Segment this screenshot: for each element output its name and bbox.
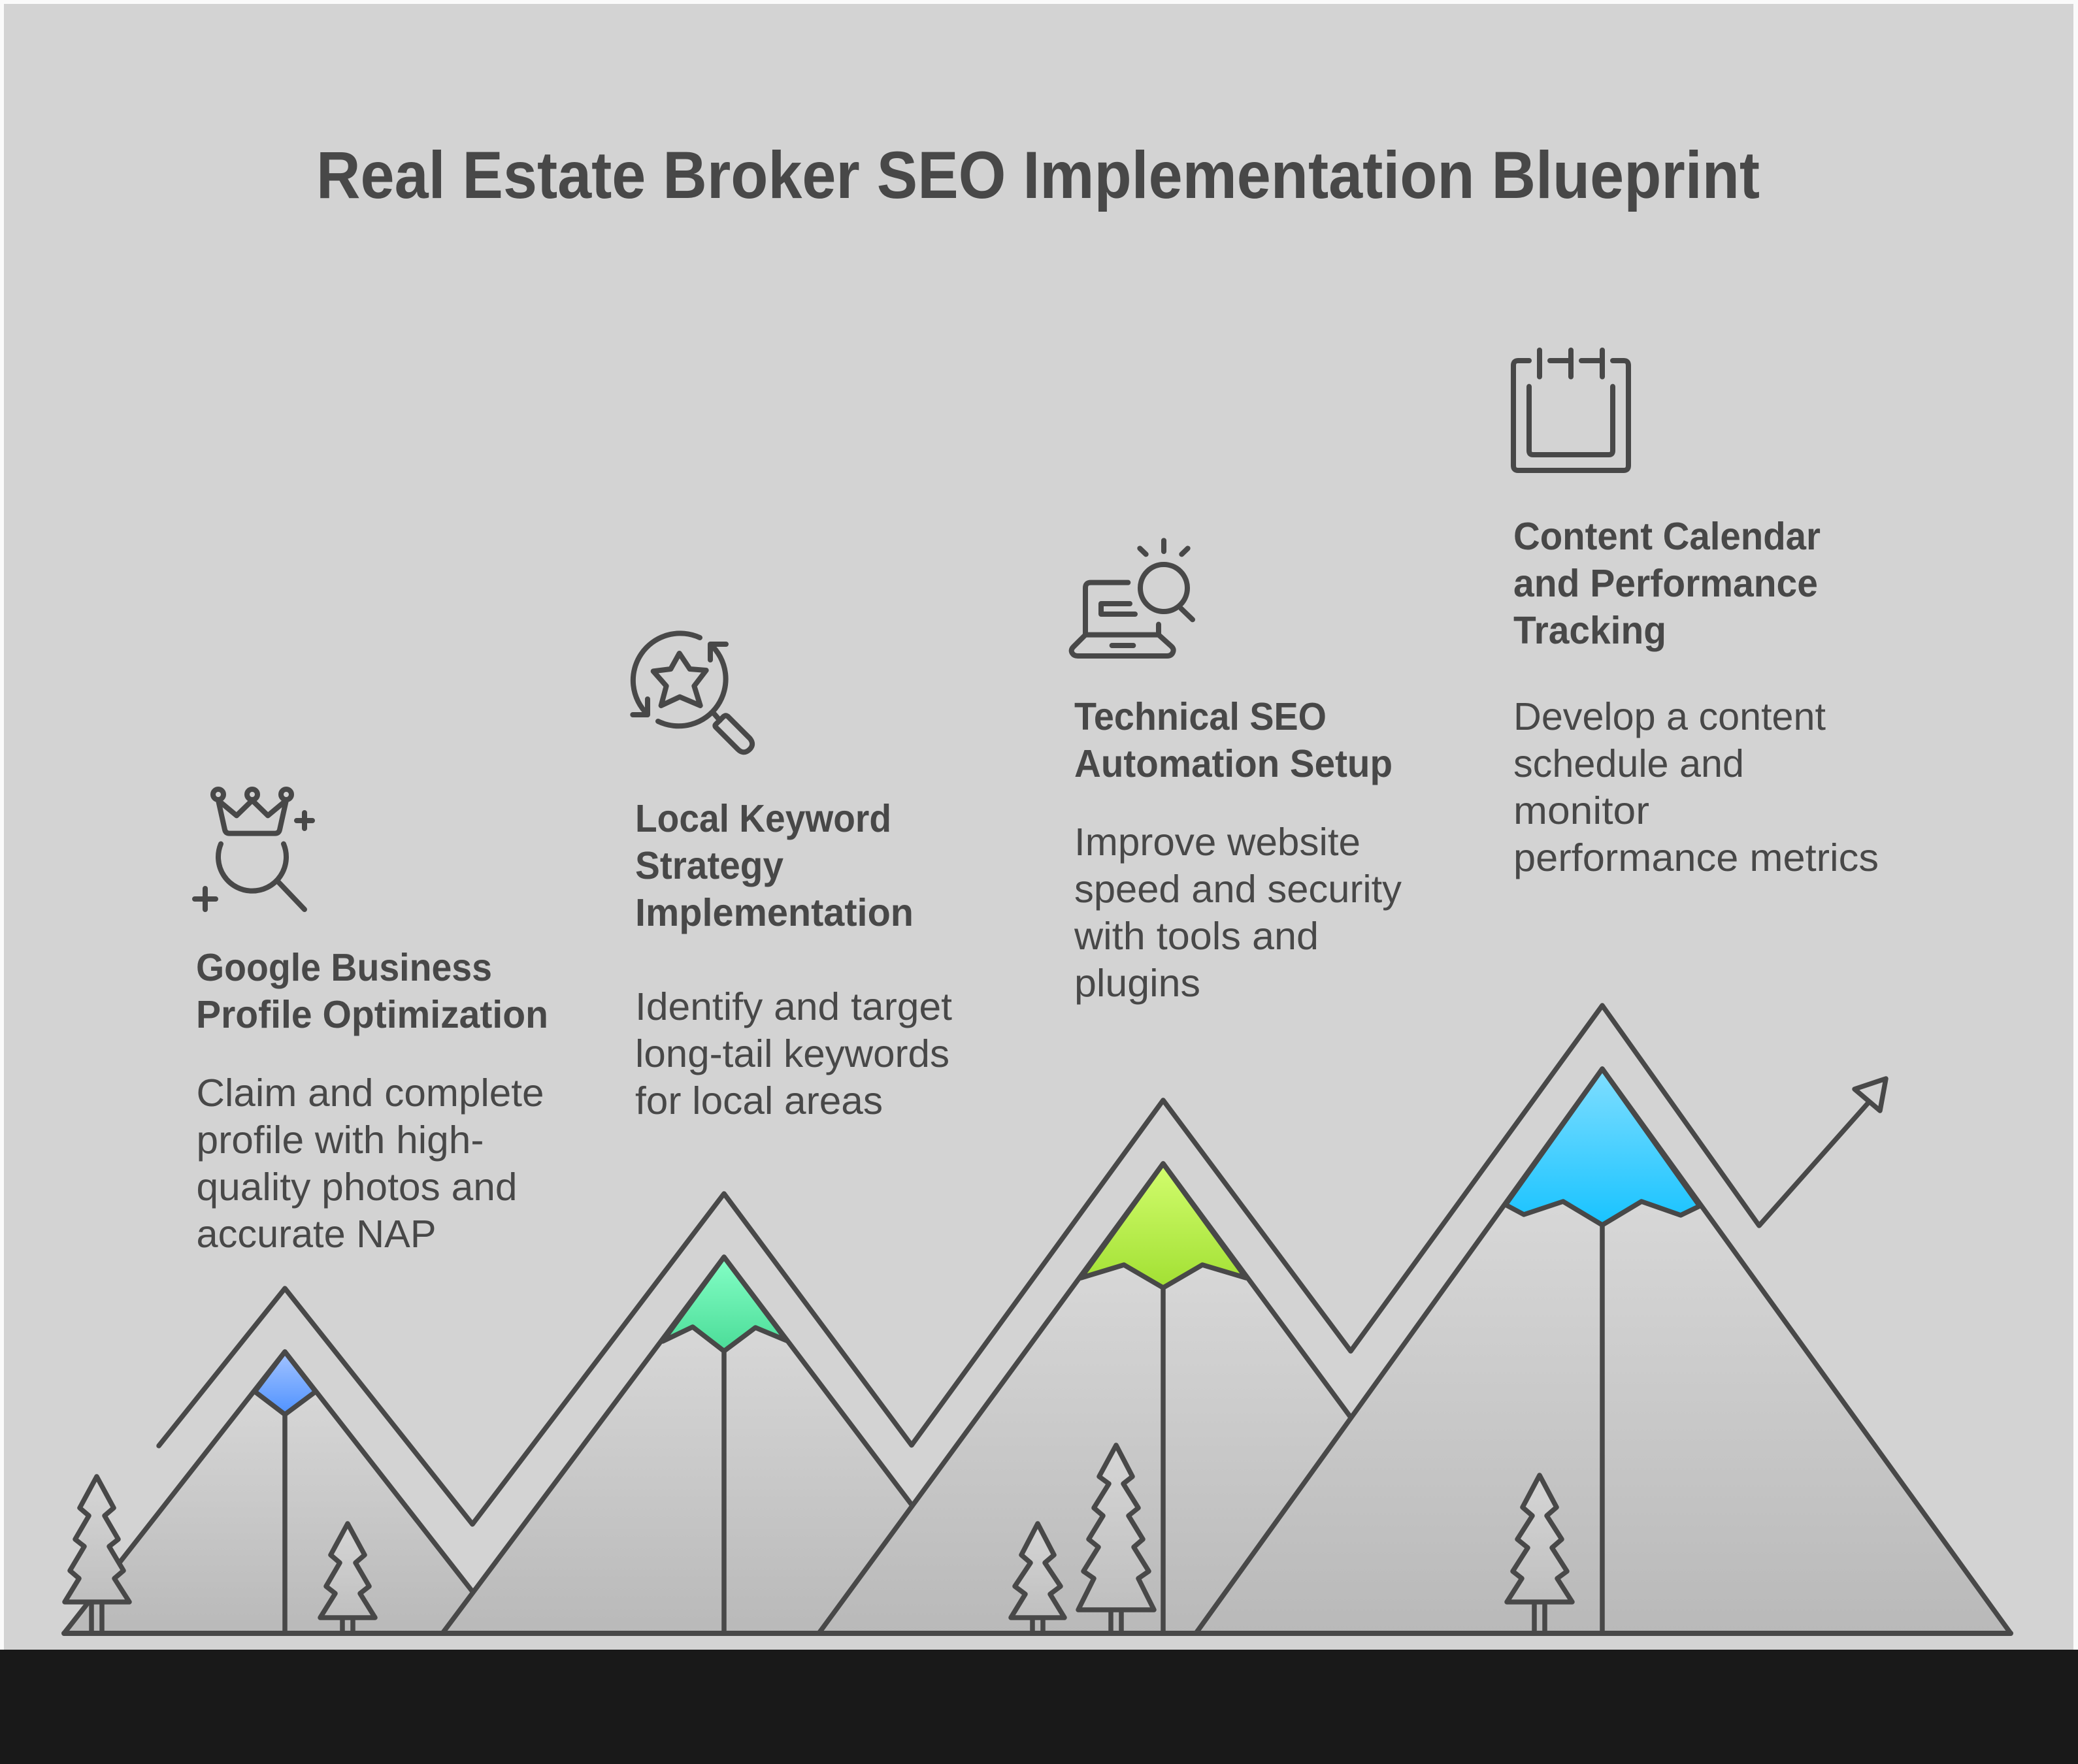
heading: Tracking (1513, 609, 1666, 652)
description: with tools and (1074, 915, 1319, 958)
description: Identify and target (635, 985, 952, 1028)
icon: laptop with magnifier (1072, 540, 1193, 656)
description (1074, 821, 1402, 1005)
description: quality photos and (196, 1166, 518, 1209)
heading (1074, 695, 1393, 785)
icon: calendar (1513, 350, 1628, 470)
tree 3 (1011, 1524, 1064, 1633)
description: schedule and (1513, 742, 1744, 785)
description (196, 1071, 544, 1256)
heading (196, 946, 548, 1036)
heading: Profile Optimization (196, 993, 548, 1036)
description: Develop a content (1513, 695, 1826, 738)
tree 1 (65, 1477, 129, 1633)
heading (635, 797, 914, 934)
heading: Implementation (635, 891, 914, 934)
mountain 4 with cyan peak (1196, 1069, 2011, 1633)
step 2: Local Keyword Strategy Implementation (633, 633, 952, 1122)
heading: Automation Setup (1074, 742, 1393, 785)
description: plugins (1074, 962, 1200, 1005)
ground line (64, 1631, 2011, 1636)
title: Real Estate Broker SEO Implementation Blueprint (316, 138, 1760, 212)
icon: star magnifier with arrows (633, 633, 752, 752)
description (635, 985, 952, 1122)
heading: Content Calendar (1513, 515, 1821, 558)
description: profile with high- (196, 1119, 484, 1162)
mountain 2 with green peak (442, 1257, 1007, 1633)
step 1: Google Business Profile Optimization (195, 789, 548, 1256)
rising zigzag line with arrow (159, 1005, 1886, 1524)
description (1513, 695, 1879, 879)
tree 5 (1507, 1475, 1572, 1633)
description: Improve website (1074, 821, 1361, 864)
mountain 3 with lime peak (819, 1164, 1509, 1633)
heading: Local Keyword (635, 797, 891, 840)
icon: crown and magnifier (195, 789, 312, 909)
mountain range diagram (64, 1005, 2011, 1633)
heading: and Performance (1513, 562, 1818, 605)
step 3: Technical SEO Automation Setup (1072, 540, 1402, 1005)
heading: Technical SEO (1074, 695, 1327, 738)
description: accurate NAP (196, 1213, 437, 1256)
heading: Strategy (635, 844, 783, 887)
mountain 1 with blue peak (64, 1352, 505, 1633)
description: speed and security (1074, 868, 1402, 911)
description: Claim and complete (196, 1071, 544, 1115)
description: performance metrics (1513, 836, 1879, 879)
heading: Google Business (196, 946, 492, 989)
description: monitor (1513, 789, 1649, 832)
heading (1513, 515, 1821, 652)
tree 4 (1078, 1445, 1154, 1633)
footer band (0, 1650, 2078, 1764)
tree 2 (320, 1524, 375, 1633)
description: long-tail keywords (635, 1032, 949, 1075)
step 4: Content Calendar and Performance Tracking (1513, 350, 1879, 879)
description: for local areas (635, 1079, 883, 1122)
